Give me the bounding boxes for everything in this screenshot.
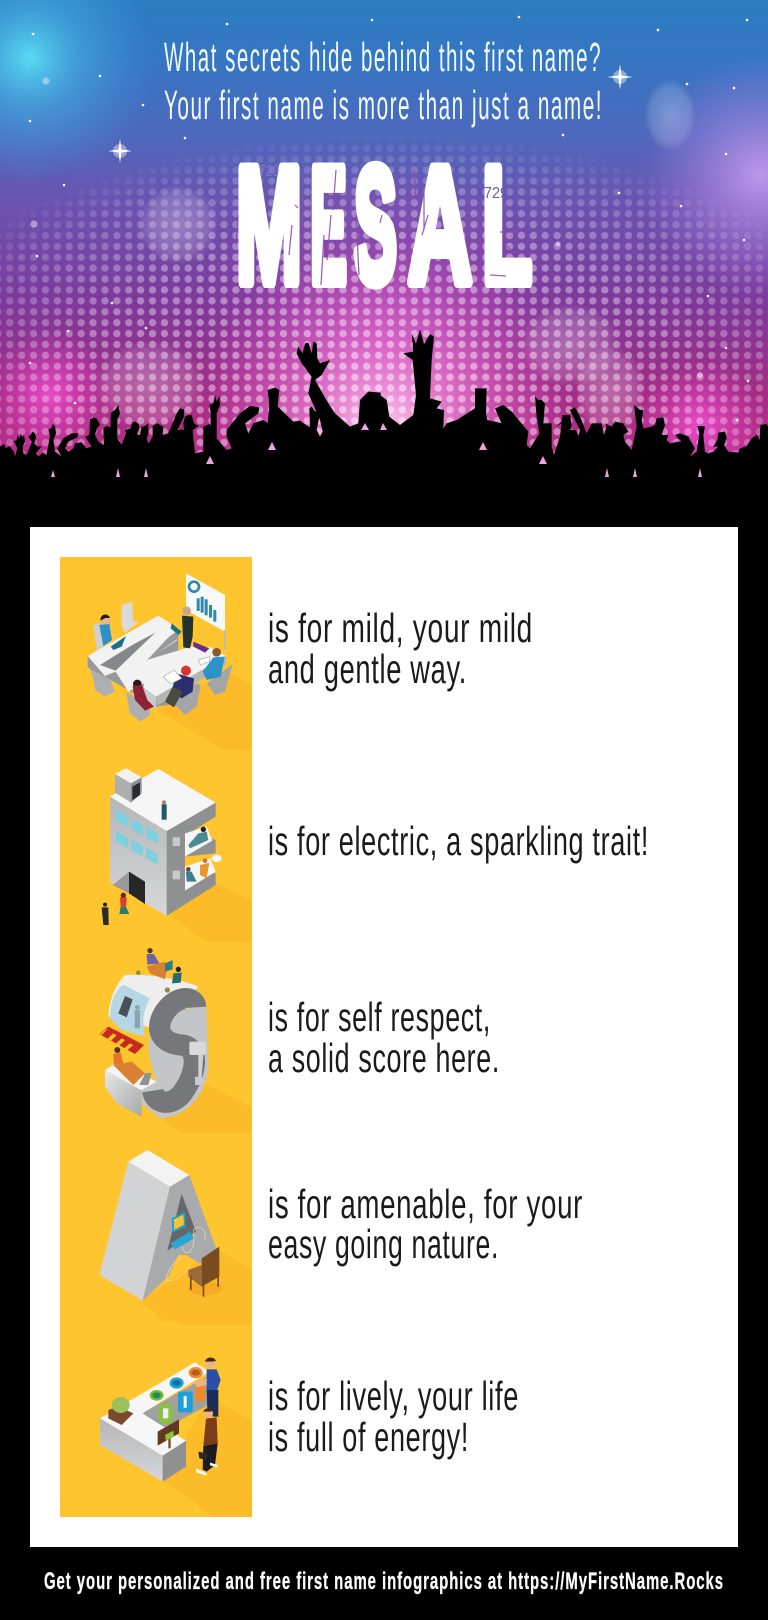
text block: S line: a solid score here. — [268, 1035, 500, 1081]
icon: isometric letter S workspace — [99, 948, 257, 1133]
title: name MESAL: A — [408, 133, 472, 317]
text block: S line: is for self respect, — [268, 994, 491, 1040]
sparkling stars — [29, 16, 749, 421]
text block: A line: easy going nature. — [268, 1221, 499, 1267]
title: name MESAL: M — [236, 133, 302, 317]
text block: S line — [268, 994, 500, 1081]
panel: concert header background — [0, 0, 768, 457]
icon: isometric letter A with desk — [99, 1150, 257, 1322]
intro heading: two lines — [164, 34, 603, 128]
text block: L line: is for lively, your life — [268, 1373, 519, 1419]
title: name MESAL: E — [310, 133, 347, 317]
icon: isometric letter L recycling counter — [100, 1308, 257, 1517]
icon: isometric letter E office building — [102, 768, 257, 942]
title: name MESAL: 729 — [484, 185, 508, 202]
text block: M line: is for mild, your mild — [268, 605, 533, 651]
crowd silhouette — [0, 329, 768, 527]
text block: M line — [268, 605, 533, 692]
title: name MESAL: 729 — [259, 163, 279, 180]
title: name MESAL: S — [354, 133, 397, 317]
crowd: right half — [379, 329, 768, 490]
panel: white content card — [30, 527, 738, 1547]
text block: L line — [268, 1373, 519, 1460]
text block: A line — [268, 1181, 583, 1267]
title: name MESAL — [236, 133, 532, 317]
infographic: L — [482, 133, 532, 317]
text block: M line: and gentle way. — [268, 646, 467, 692]
panel: yellow illustration column — [60, 557, 257, 1517]
text block: A line: is for amenable, for your — [268, 1181, 583, 1227]
text block: L line: is full of energy! — [268, 1414, 469, 1460]
crowd: gaps between bodies — [51, 423, 702, 477]
icon: isometric letter M meeting table — [88, 573, 257, 750]
crowd: left half — [0, 342, 381, 490]
